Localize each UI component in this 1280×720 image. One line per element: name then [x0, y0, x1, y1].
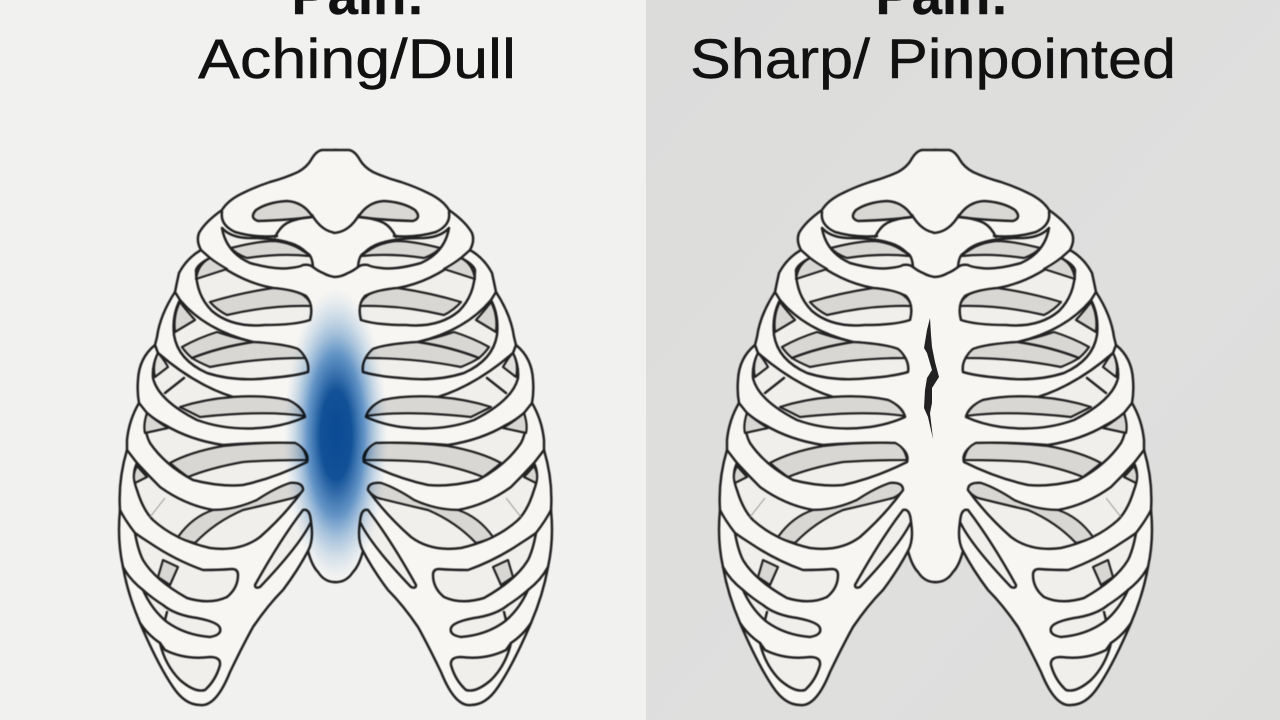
- illustration: rib cage, left: [119, 150, 552, 705]
- icon: crack in the sternum: [924, 318, 939, 439]
- heading: Aching/Dull: Aching/Dull: [198, 27, 516, 90]
- heading: Sharp/ Pinpointed: Sharp/ Pinpointed: [690, 27, 1176, 90]
- panel: sharp pinpointed pain: [646, 0, 1280, 720]
- highlight: blue ache around the sternum: [284, 287, 388, 583]
- illustration: rib cage, right: [719, 150, 1152, 705]
- panel: aching dull pain: [0, 0, 646, 720]
